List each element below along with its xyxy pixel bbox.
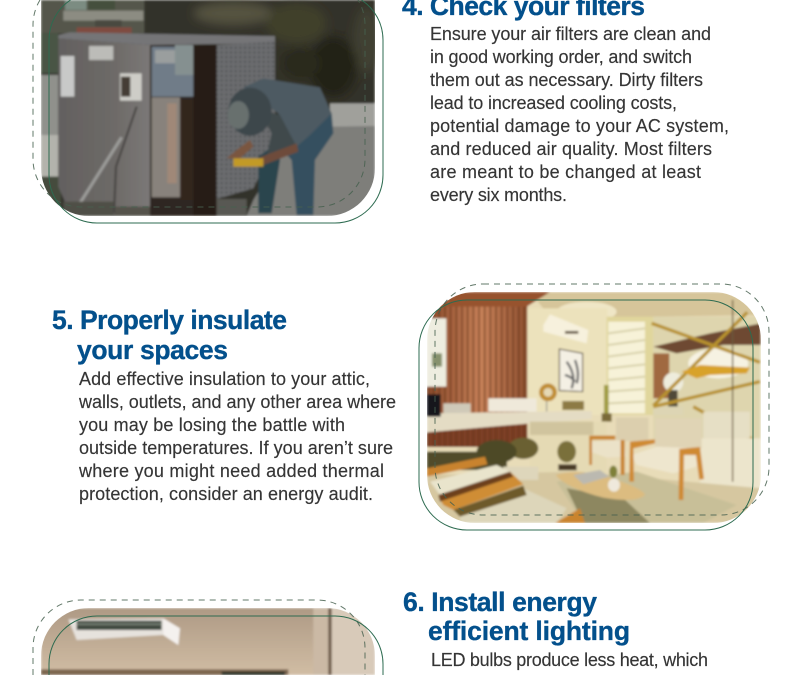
text: tip 4 body: every six months.: [430, 185, 567, 205]
panel: tip 5 properly insulate your spaces: [52, 284, 769, 530]
text: tip 4 body: potential damage to your AC system,: [430, 116, 729, 136]
panel: tip 4 check your filters: [33, 0, 729, 223]
AC unit: [58, 38, 150, 216]
floor: [427, 472, 761, 523]
heading: 6. Install energy efficient lighting: 6. Install energy: [403, 587, 597, 617]
ring decor: [545, 398, 548, 412]
frame: solid green outline: [49, 616, 383, 675]
flowers: [427, 318, 446, 387]
text: tip 5 body: outside temperatures. If you aren’t sure: [79, 438, 393, 458]
text: tip 4 body: [430, 24, 729, 205]
heading: 6. Install energy efficient lighting: [403, 587, 630, 646]
text: tip 5 body: [78, 369, 396, 504]
heading: 5. Properly insulate your spaces: 5. Properly insulate: [52, 305, 287, 335]
text: tip 4 body: lead to increased cooling costs,: [430, 93, 677, 113]
text: tip 5 body: where you might need added thermal: [78, 461, 384, 481]
wall and floor: [330, 103, 375, 128]
text: tip 4 body: Ensure your air filters are clean and: [430, 24, 711, 44]
text: tip 5 body: you may be losing the battle with: [79, 415, 345, 435]
AC unit: [543, 314, 588, 343]
panel: tip 6 install energy efficient lighting: [33, 587, 708, 675]
man: [258, 143, 280, 213]
text: tip 4 body: them out as necessary. Dirty filters: [430, 70, 703, 90]
heading: 6. Install energy efficient lighting: efficient lighting: [428, 616, 630, 646]
frame: solid green outline: [419, 300, 753, 530]
photo: living room with wall AC unit: [427, 292, 761, 523]
heading: 5. Properly insulate your spaces: [52, 305, 287, 365]
text: tip 5 body: Add effective insulation to your attic,: [79, 369, 370, 389]
heading: 5. Properly insulate your spaces: your spaces: [77, 335, 228, 365]
text: tip 4 body: are meant to be changed at least: [430, 162, 701, 182]
daybed: [460, 488, 567, 523]
photo: room with ceiling AC unit: [41, 608, 375, 675]
oval table: [556, 472, 645, 500]
frame: dashed outline: [33, 0, 365, 207]
text: tip 6 body: LED bulbs produce less heat, which: [431, 650, 708, 670]
text: tip 5 body: walls, outlets, and any other area where: [78, 392, 396, 412]
frame: dashed outline: [33, 600, 365, 675]
frame: dashed outline: [435, 284, 769, 515]
frame: solid green outline: [49, 0, 383, 223]
text: tip 4 body: and reduced air quality. Most filters: [430, 139, 712, 159]
window blinds: [607, 317, 653, 415]
text: tip 5 body: protection, consider an energy audit.: [79, 484, 373, 504]
ceiling AC unit: [68, 617, 165, 642]
items and shelf: [443, 403, 471, 415]
mirror wall: [653, 317, 761, 442]
plants: [427, 452, 507, 470]
armchairs: [616, 418, 648, 441]
text: tip 4 body: in good working order, and switch: [430, 47, 692, 67]
right cabinets: [700, 438, 761, 488]
photo: technician servicing rooftop AC unit: [41, 0, 380, 216]
wall art: [559, 349, 583, 392]
